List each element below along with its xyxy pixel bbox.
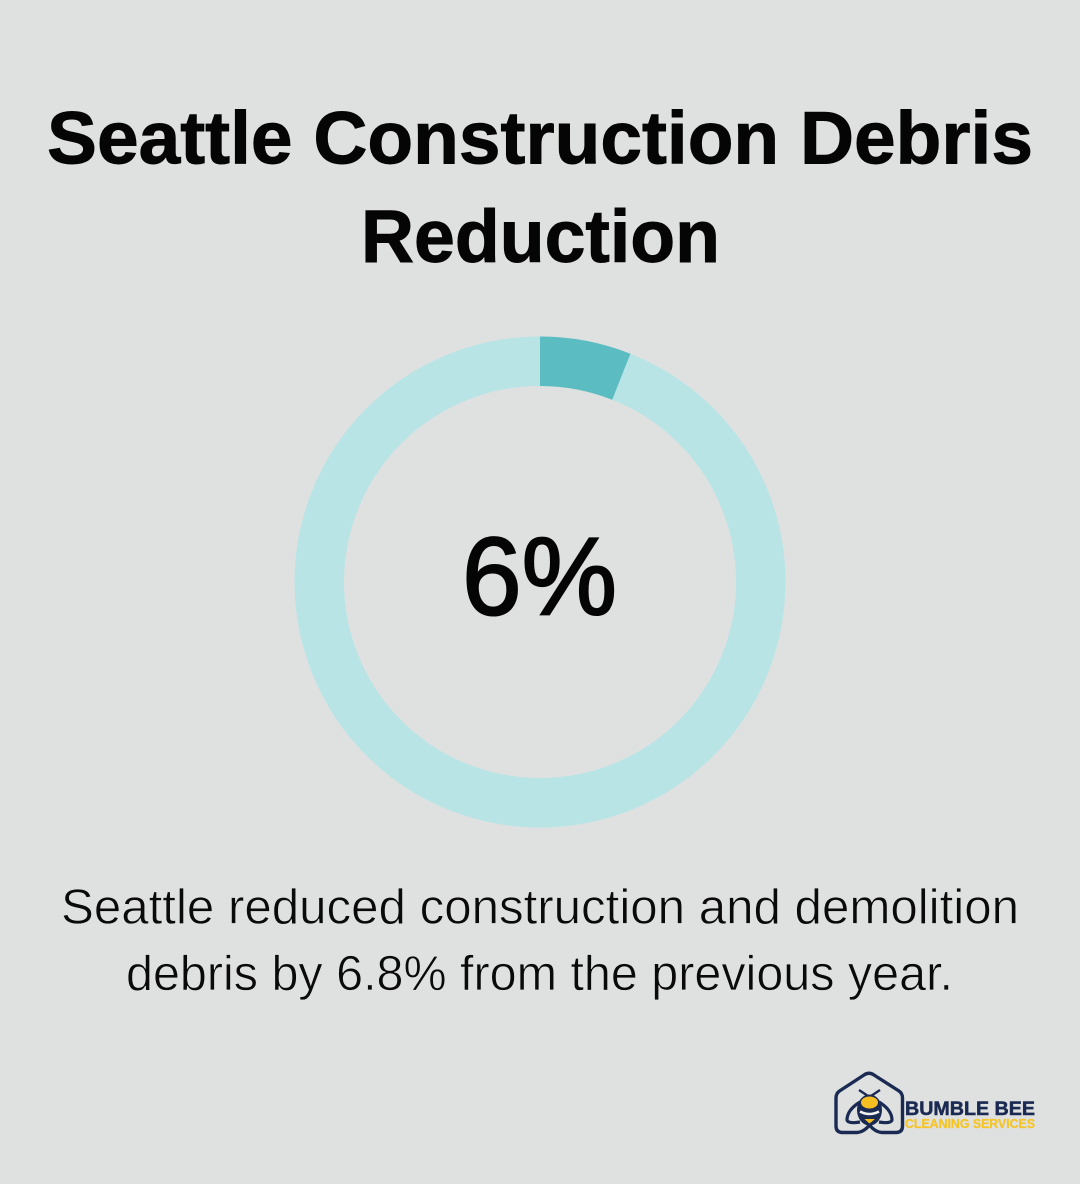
description text: debris by 6.8% from the previous year.: [126, 946, 953, 1001]
description text: Seattle reduced construction and demolition: [61, 880, 1019, 934]
icon: house outline: [836, 1073, 902, 1132]
donut chart: [319, 336, 761, 803]
donut centre value: 6%: [462, 516, 617, 638]
title: [47, 96, 1033, 278]
logo: Bumble Bee Cleaning Services: [836, 1073, 1035, 1132]
donut value segment: 6%: [540, 336, 630, 400]
description text: [61, 880, 1019, 1001]
title: Seattle Construction Debris: [47, 96, 1033, 180]
icon: bee: [847, 1090, 892, 1126]
title: Reduction: [361, 195, 720, 278]
donut track: [319, 361, 761, 803]
logo wordmark: BUMBLE BEE: [905, 1099, 1035, 1120]
logo tagline: CLEANING SERVICES: [905, 1116, 1035, 1131]
